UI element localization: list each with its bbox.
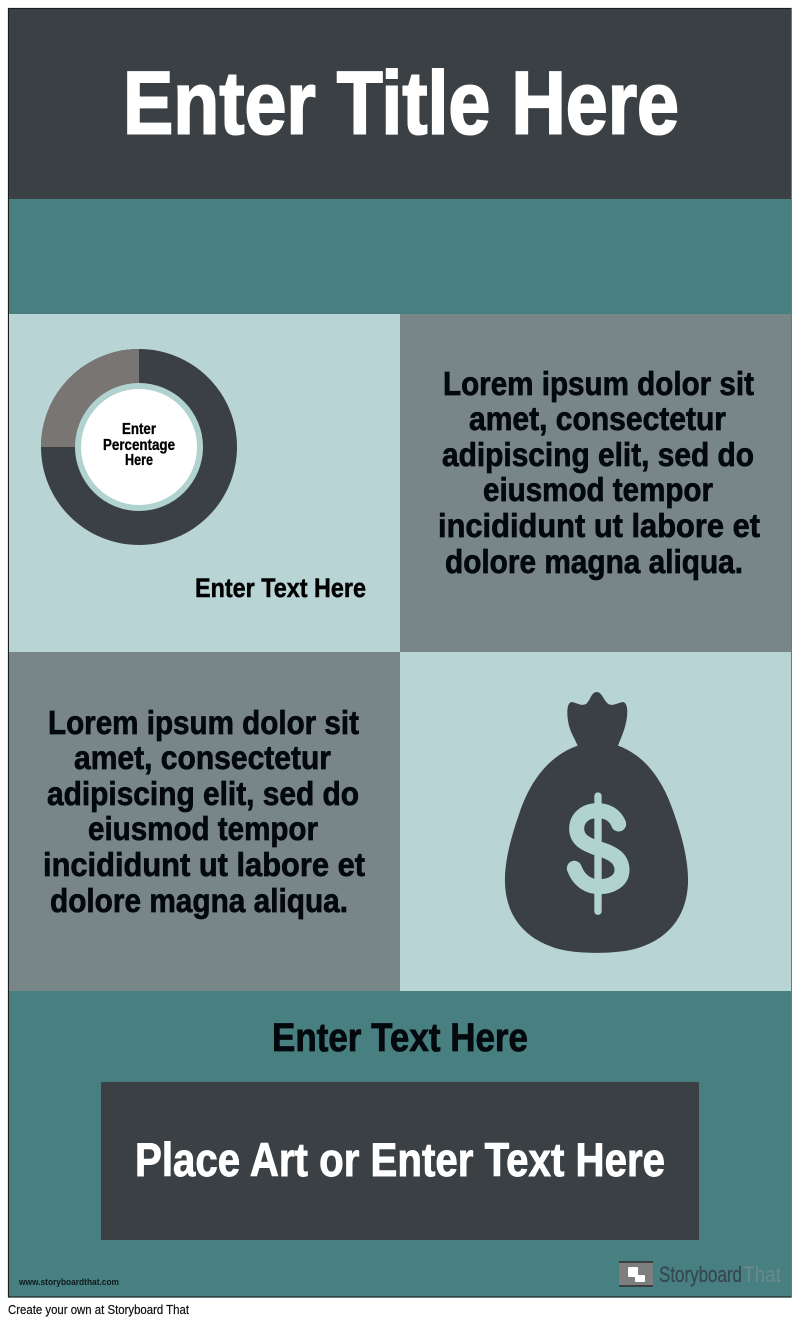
website url: www.storyboardthat.com xyxy=(18,1277,119,1287)
paragraph: adipiscing elit, sed do xyxy=(442,436,754,473)
placeholder box xyxy=(101,1082,699,1240)
paragraph: adipiscing elit, sed do xyxy=(47,775,359,812)
donut label: Enter xyxy=(122,421,156,438)
panel: bottom section xyxy=(9,991,791,1296)
icon: dollar sign xyxy=(574,796,622,911)
panel: top right text xyxy=(400,314,791,652)
logo: Storyboard That: Storyboard xyxy=(659,1262,742,1287)
panel: percentage xyxy=(9,314,400,652)
placeholder text: Place Art or Enter Text Here xyxy=(135,1133,665,1186)
section heading: Enter Text Here xyxy=(272,1016,528,1060)
paragraph: dolore magna aliqua. xyxy=(50,882,348,919)
logo: Storyboard That: That xyxy=(743,1262,781,1287)
icon: money bag xyxy=(505,692,688,953)
panel: lower left text xyxy=(9,652,400,991)
donut label: Percentage xyxy=(103,437,175,454)
paragraph: incididunt ut labore et xyxy=(438,507,760,544)
paragraph: Lorem ipsum dolor sit xyxy=(48,704,359,741)
donut label: Here xyxy=(125,452,153,469)
paragraph: Lorem ipsum dolor sit xyxy=(443,365,754,402)
paragraph: amet, consectetur xyxy=(469,400,726,437)
logo: Storyboard That xyxy=(619,1261,781,1287)
paragraph: eiusmod tempor xyxy=(483,471,713,508)
paragraph xyxy=(43,704,365,919)
panel: title banner xyxy=(9,9,791,199)
title: Enter Title Here xyxy=(123,52,679,152)
paragraph xyxy=(438,365,760,580)
paragraph: eiusmod tempor xyxy=(88,810,318,847)
donut label xyxy=(103,421,175,469)
percentage caption: Enter Text Here xyxy=(195,573,366,603)
paragraph: amet, consectetur xyxy=(74,739,331,776)
panel: teal subtitle band xyxy=(9,199,791,314)
footer credit: Create your own at Storyboard That xyxy=(8,1303,189,1317)
paragraph: dolore magna aliqua. xyxy=(445,543,743,580)
paragraph: incididunt ut labore et xyxy=(43,846,365,883)
donut chart xyxy=(41,349,237,545)
panel: money bag xyxy=(400,652,791,991)
